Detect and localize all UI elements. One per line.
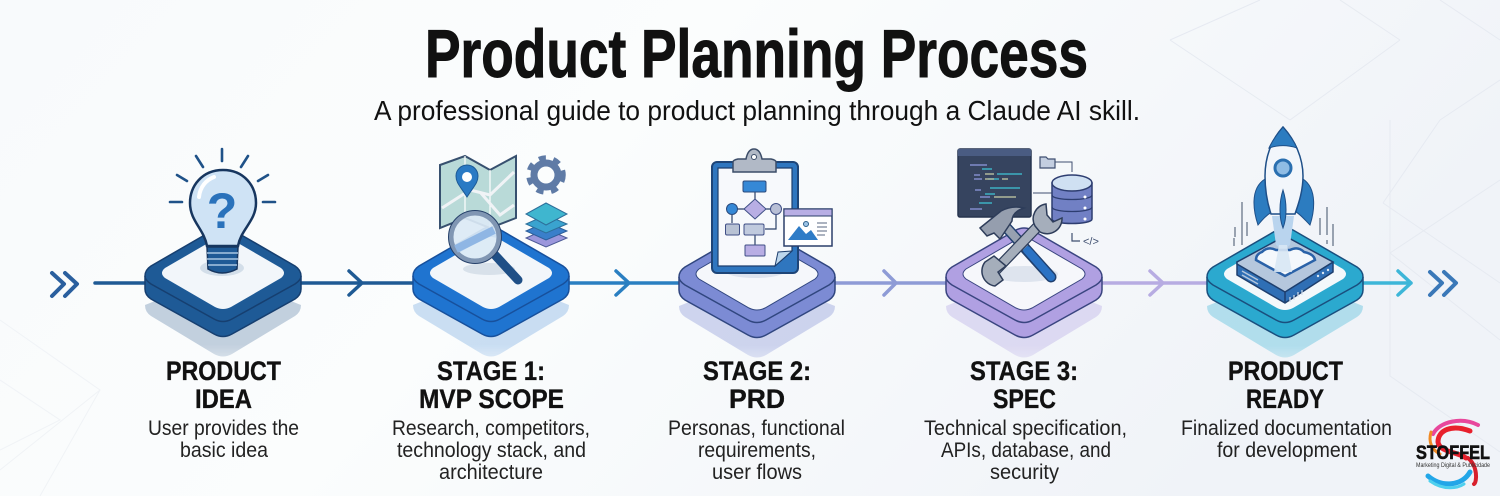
title: Product Planning Process <box>425 16 1088 92</box>
icon: rocket on server <box>1234 127 1333 303</box>
label: stage 1: Research, competitors, <box>392 417 590 440</box>
label: product idea <box>148 356 299 462</box>
icon: clipboard with flowchart <box>712 149 832 273</box>
platform: stage 2 <box>678 248 836 358</box>
label: product idea: PRODUCT <box>166 356 281 386</box>
label: stage 3 <box>924 356 1127 484</box>
label: product idea: User provides the <box>148 417 299 440</box>
label: stage 3: STAGE 3: <box>970 356 1078 386</box>
icon: code, database, hammer and wrench: </> <box>1083 236 1099 248</box>
label: stage 1: STAGE 1: <box>437 356 545 386</box>
label: stage 2 <box>668 356 845 484</box>
label: stage 2: requirements, <box>698 439 816 462</box>
label: product ready: Finalized documentation <box>1181 417 1392 440</box>
icon: light bulb <box>170 149 275 273</box>
logo: stoffel: STOFFEL <box>1416 443 1490 464</box>
label: stage 1: technology stack, and <box>397 439 586 462</box>
label: stage 1: architecture <box>439 461 543 484</box>
label: stage 2: Personas, functional <box>668 417 845 440</box>
label: product idea: basic idea <box>180 439 268 462</box>
platform: stage 3 <box>946 228 1102 358</box>
label: product ready: PRODUCT <box>1228 356 1343 386</box>
platform: product idea <box>145 227 301 356</box>
label: product idea: IDEA <box>195 384 252 414</box>
label: stage 2: STAGE 2: <box>703 356 811 386</box>
icon: code, database, hammer and wrench <box>958 149 1099 286</box>
label: stage 3: Technical specification, <box>924 417 1127 440</box>
icon: light bulb: ? <box>207 183 237 239</box>
label: product ready: READY <box>1246 384 1324 414</box>
label: stage 3: SPEC <box>993 384 1056 414</box>
flow arrows <box>52 271 1456 296</box>
label: stage 2: PRD <box>729 384 785 414</box>
platform: stage 1 <box>413 227 569 356</box>
label: stage 1 <box>392 356 590 484</box>
icon: map, magnifier, gear and layers <box>440 156 567 280</box>
subtitle: A professional guide to product planning through a Claude AI skill. <box>374 95 1140 126</box>
platform: product ready <box>1207 228 1363 358</box>
label: stage 3: security <box>990 461 1059 484</box>
label: stage 3: APIs, database, and <box>941 439 1111 462</box>
label: stage 1: MVP SCOPE <box>419 384 564 414</box>
logo: stoffel <box>1416 421 1490 488</box>
label: stage 2: user flows <box>712 461 802 484</box>
label: product ready <box>1181 356 1392 462</box>
label: product ready: for development <box>1217 439 1357 462</box>
